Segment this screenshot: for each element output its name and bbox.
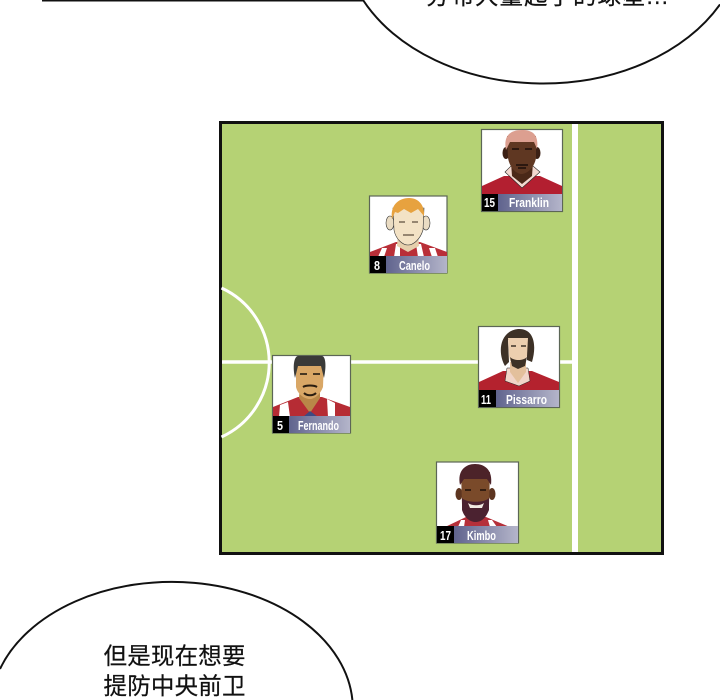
name bar: Canelo: 8 <box>374 258 380 273</box>
portrait: Fernando <box>273 356 350 417</box>
player card: Kimbo <box>436 462 518 543</box>
bubble text: bottom <box>104 643 246 699</box>
portrait: Franklin <box>482 130 562 194</box>
player card: Pissarro <box>478 326 560 408</box>
bubble text: bottom: 但是现在想要 <box>104 643 246 669</box>
name bar: Pissarro <box>479 390 559 407</box>
name bar: Franklin <box>482 194 562 211</box>
name bar: Kimbo: Kimbo <box>467 528 496 543</box>
name bar: Fernando: Fernando <box>298 418 339 433</box>
player card: Franklin <box>482 130 562 212</box>
speech bubble: bottom <box>0 582 352 700</box>
name bar: Fernando: 5 <box>277 418 283 433</box>
name bar: Franklin: Franklin <box>509 195 549 210</box>
portrait: Kimbo <box>445 464 510 527</box>
name bar: Pissarro: 11 <box>481 392 491 407</box>
speech bubble: top <box>363 0 720 83</box>
football pitch <box>220 122 662 554</box>
top speech panel line <box>42 0 363 2</box>
bubble text: bottom: 提防中央前卫 <box>104 673 246 699</box>
name bar: Pissarro: Pissarro <box>506 392 547 407</box>
vertical pitch line <box>572 124 578 552</box>
player card: Canelo <box>370 196 447 273</box>
player card: Fernando <box>272 356 350 433</box>
name bar: Kimbo <box>437 526 518 543</box>
name bar: Fernando <box>273 416 350 433</box>
name bar: Kimbo: 17 <box>440 528 451 543</box>
halfway line <box>222 360 574 364</box>
name bar: Franklin: 15 <box>484 195 495 210</box>
name bar: Canelo: Canelo <box>399 258 430 273</box>
portrait: Pissarro <box>479 329 559 391</box>
portrait: Canelo <box>370 198 447 257</box>
centre circle arc <box>222 288 269 437</box>
name bar: Canelo <box>370 256 447 273</box>
